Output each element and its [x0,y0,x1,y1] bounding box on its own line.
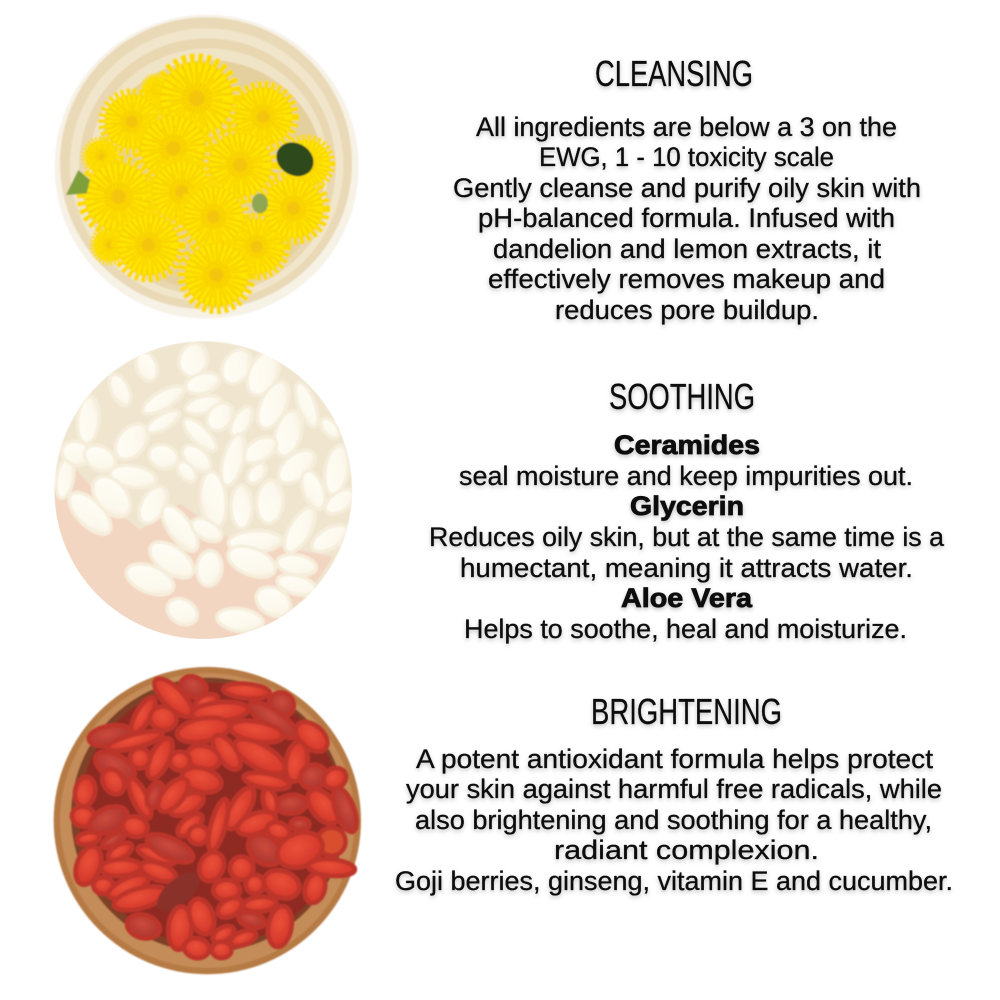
soothing description: Helps to soothe, heal and moisturize. [464,614,907,644]
soothing description: Glycerin [630,491,744,521]
brightening description: your skin against harmful free radicals, while [406,774,942,804]
brightening description: A potent antioxidant formula helps protect [416,744,934,774]
dark green closed bud [270,136,320,183]
text block: soothing [429,376,945,644]
goji berries [69,673,362,960]
text block: brightening [395,691,953,896]
soothing description: Ceramides [614,430,760,460]
cleansing description [453,112,921,325]
image: bowl of dandelion flowers [55,15,359,319]
image: circle of white rice grains [53,340,359,640]
heading: SOOTHING: SOOTHING [609,376,755,417]
bamboo bowl [55,15,359,319]
cleansing description: effectively removes makeup and [488,264,885,294]
heading: BRIGHTENING: BRIGHTENING [591,691,782,732]
soothing description: humectant, meaning it attracts water. [460,553,913,583]
cleansing description: pH-balanced formula. Infused with [478,203,895,233]
cleansing description: EWG, 1 - 10 toxicity scale [539,142,834,172]
soothing description: Reduces oily skin, but at the same time is a [429,522,945,552]
rice grains [53,340,359,634]
cleansing description: Gently cleanse and purify oily skin with [453,173,921,203]
soothing description: seal moisture and keep impurities out. [459,461,913,491]
wooden bowl [54,667,361,974]
green sepals [252,193,268,213]
cleansing description: All ingredients are below a 3 on the [476,112,897,142]
soothing description [429,430,945,644]
text block: cleansing [453,53,921,325]
brightening description: also brightening and soothing for a healthy, [415,805,932,835]
image: wooden bowl of goji berries [54,667,362,974]
heading: CLEANSING: CLEANSING [595,53,753,94]
rice background [53,341,352,640]
brightening description: Goji berries, ginseng, vitamin E and cucumber. [395,866,953,896]
dandelion blossoms [81,58,333,310]
soothing description: Aloe Vera [621,583,753,613]
cleansing description: dandelion and lemon extracts, it [493,234,882,264]
brightening description: radiant complexion. [554,835,819,865]
cleansing description: reduces pore buildup. [555,295,819,325]
brightening description [395,744,953,896]
green leaf [66,170,90,195]
